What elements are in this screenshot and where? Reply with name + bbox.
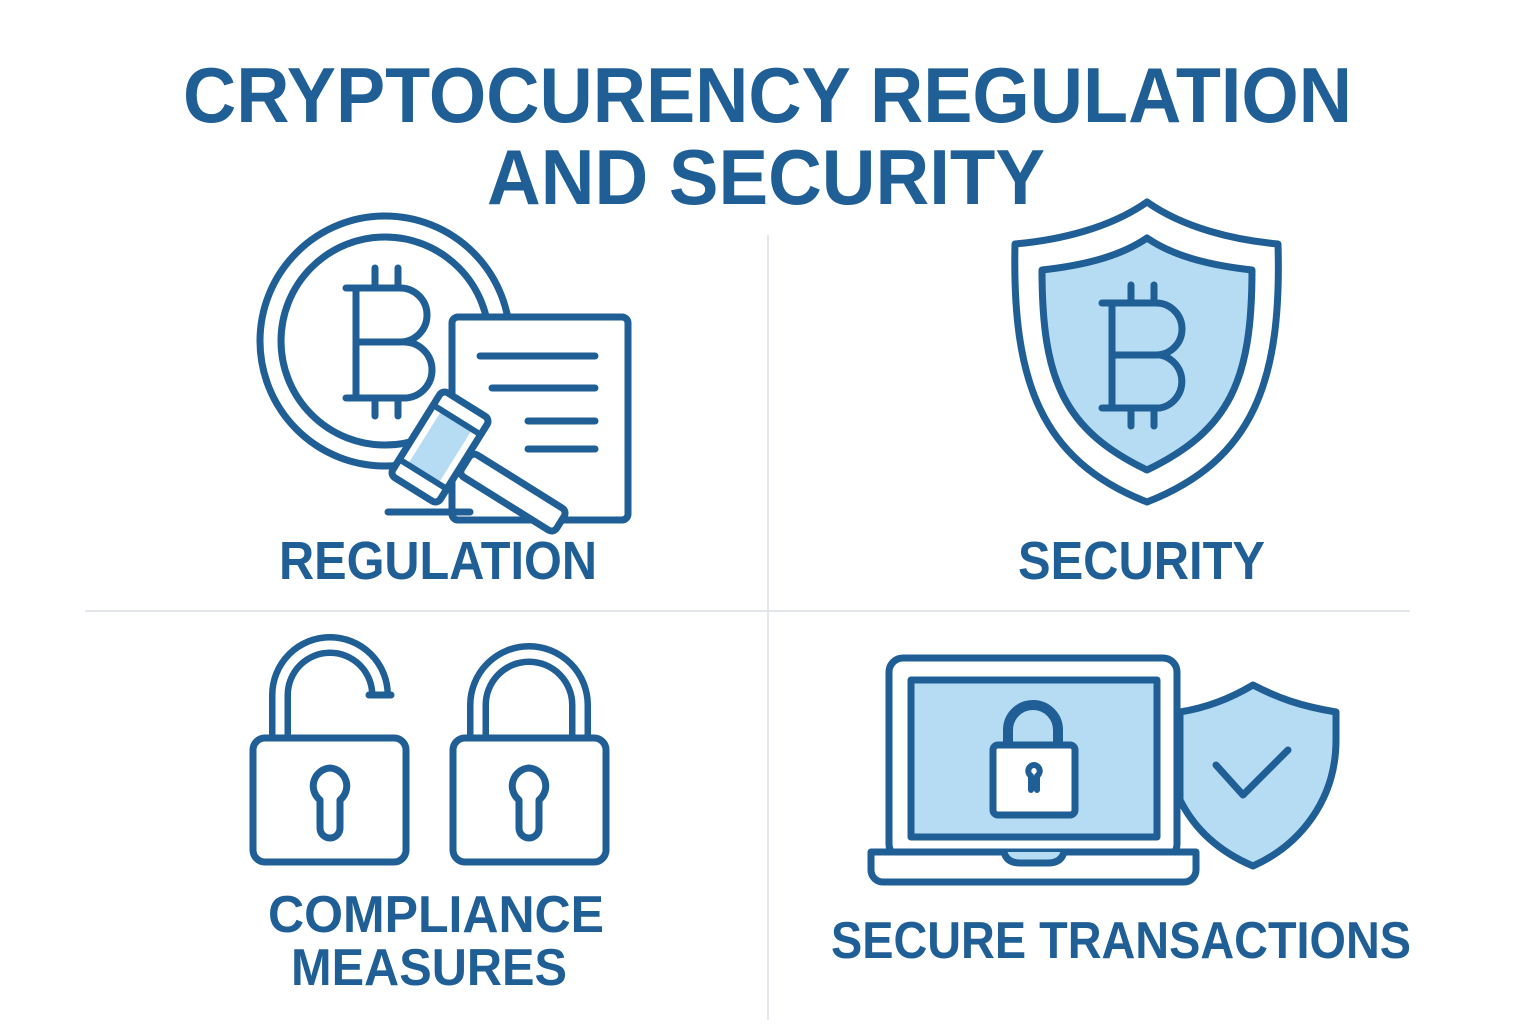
label: compliance measures: COMPLIANCE — [268, 886, 604, 944]
label: security: SECURITY — [1018, 531, 1265, 591]
icon: laptop with lock and shield — [871, 658, 1336, 882]
label: compliance measures — [268, 886, 604, 997]
label: secure transactions: SECURE TRANSACTIONS — [831, 912, 1411, 970]
title — [183, 51, 1352, 221]
label: compliance measures: MEASURES — [291, 939, 567, 997]
icon: regulation magnifier bitcoin gavel document — [260, 216, 628, 565]
title: AND SECURITY — [487, 133, 1045, 221]
icon: security shield — [1015, 202, 1278, 502]
title: CRYPTOCURENCY REGULATION — [183, 51, 1352, 139]
label: regulation: REGULATION — [279, 531, 597, 591]
icon: compliance locks — [253, 645, 606, 862]
